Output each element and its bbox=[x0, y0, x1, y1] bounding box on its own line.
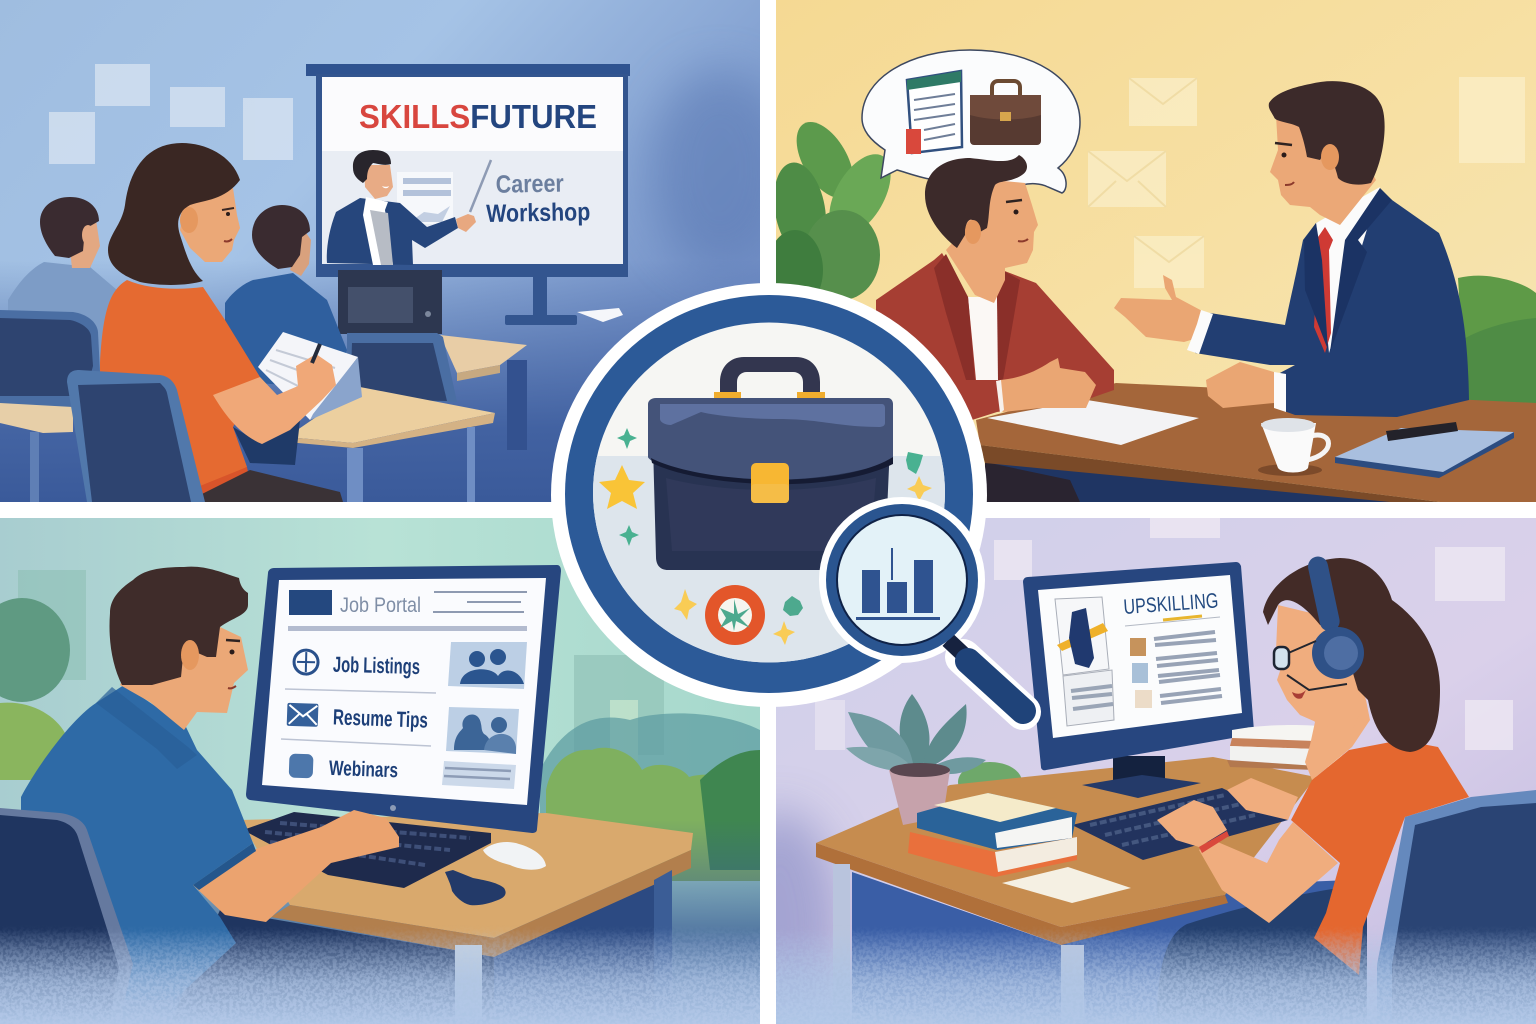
slide icon bbox=[397, 172, 453, 224]
coffee cup bbox=[1258, 418, 1328, 476]
panel: online job portal bbox=[0, 518, 760, 1024]
lower fog bbox=[776, 925, 1536, 1024]
right chair bbox=[347, 333, 457, 402]
under-desk shadow bbox=[852, 872, 1367, 1024]
writing arm bbox=[213, 354, 336, 444]
woman's face bbox=[180, 188, 240, 262]
desk bbox=[816, 757, 1316, 1024]
portal header: Job Portal bbox=[340, 594, 421, 617]
plant bbox=[846, 694, 986, 825]
screen subtitle: Career bbox=[496, 170, 564, 199]
notebook bbox=[258, 332, 362, 420]
document icon bbox=[906, 71, 962, 154]
keyboard bbox=[1072, 788, 1288, 860]
magnifying glass with chart bbox=[819, 497, 1023, 712]
panel: career workshop bbox=[0, 0, 790, 502]
resume tips row: Resume Tips bbox=[333, 704, 428, 733]
panel: online upskilling bbox=[720, 518, 1536, 1024]
thought bubble bbox=[862, 50, 1080, 193]
desk bbox=[240, 813, 693, 1024]
loose papers bbox=[1002, 867, 1131, 903]
woman with headset bbox=[1157, 555, 1536, 1024]
book stack bbox=[908, 793, 1077, 877]
resume tips row bbox=[287, 703, 428, 733]
presenter bbox=[327, 150, 491, 265]
young man in red blazer bbox=[876, 155, 1114, 420]
man at computer bbox=[21, 567, 399, 1000]
bush bbox=[1458, 276, 1536, 413]
desk bbox=[976, 383, 1536, 502]
trees bbox=[0, 598, 760, 881]
seated person right bbox=[225, 205, 347, 390]
under-desk shadow bbox=[182, 884, 654, 1002]
woman taking notes bbox=[100, 143, 362, 502]
briefcase icon bbox=[970, 81, 1041, 145]
seated person left bbox=[8, 197, 116, 368]
stars and sparkles bbox=[599, 428, 932, 645]
monitor bbox=[1023, 562, 1254, 798]
presentation screen bbox=[306, 64, 630, 325]
main desk bbox=[287, 387, 495, 502]
stacked books on desk bbox=[1227, 725, 1342, 770]
webinars row: Webinars bbox=[329, 757, 398, 782]
panel: mentorship meeting bbox=[767, 0, 1536, 502]
left desk bbox=[0, 403, 73, 502]
mouse bbox=[483, 842, 546, 870]
background notes bbox=[815, 518, 1513, 750]
screen title: SKILLSFUTURE bbox=[359, 98, 597, 135]
job listings row: Job Listings bbox=[333, 652, 420, 679]
chair bbox=[0, 808, 133, 1024]
gesturing hand bbox=[1114, 275, 1206, 342]
briefcase bbox=[648, 357, 893, 570]
screen subtitle bbox=[486, 175, 590, 226]
right desk bbox=[440, 335, 527, 450]
compass badge bbox=[705, 585, 765, 645]
tablet and pen bbox=[1335, 422, 1514, 478]
background notes bbox=[1088, 77, 1525, 288]
typing arm bbox=[1199, 822, 1338, 923]
plant bbox=[776, 122, 891, 299]
papers bbox=[987, 400, 1199, 445]
left chair bbox=[0, 310, 100, 407]
bush bbox=[958, 762, 1022, 802]
front chair bbox=[67, 370, 205, 502]
job listings row bbox=[294, 650, 420, 679]
course card bbox=[1055, 597, 1114, 726]
left haze bbox=[720, 810, 840, 1024]
screen subtitle: Workshop bbox=[486, 198, 590, 228]
resting hand bbox=[1206, 362, 1274, 408]
webinars row bbox=[289, 754, 398, 782]
upskilling title: UPSKILLING bbox=[1123, 589, 1219, 619]
background buildings bbox=[18, 570, 664, 728]
chair bbox=[1377, 790, 1536, 1024]
background notes bbox=[49, 64, 293, 164]
head and hair bbox=[1276, 605, 1366, 735]
lectern bbox=[338, 270, 442, 334]
content list bbox=[1130, 632, 1222, 708]
neck bbox=[1293, 695, 1370, 780]
mentor in navy suit bbox=[1114, 81, 1469, 417]
keyboard bbox=[243, 812, 491, 888]
portal header bbox=[288, 590, 527, 631]
presenter remote bbox=[445, 870, 506, 905]
centre badge: job search bbox=[551, 283, 1023, 712]
lower fog bbox=[0, 925, 760, 1024]
monitor bbox=[246, 565, 561, 833]
